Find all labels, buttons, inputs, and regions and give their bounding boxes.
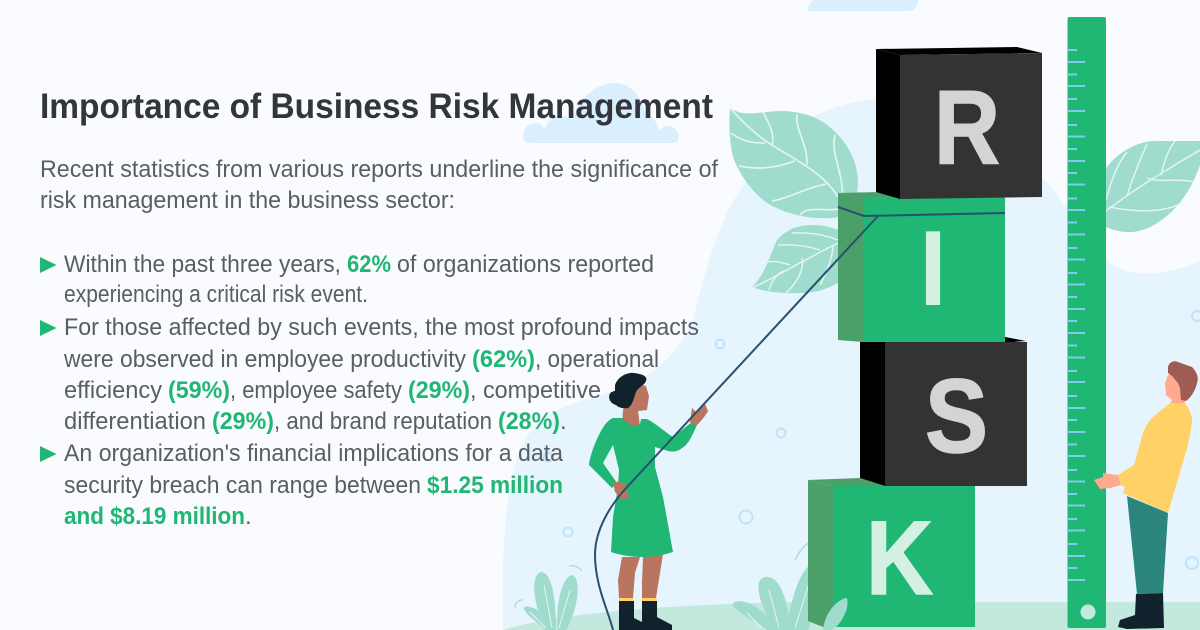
bullet 2 [40, 314, 699, 435]
bullet 2: (28%) [498, 408, 560, 435]
letter R: R [934, 70, 1000, 186]
plant sprigs [515, 540, 823, 608]
foreground plant leaf [823, 598, 848, 630]
plants left [524, 572, 578, 630]
large leaf [729, 108, 858, 218]
hair [609, 373, 646, 408]
block I [838, 192, 1005, 342]
dress [589, 418, 697, 557]
bullet 1: Within the past three years, [64, 251, 341, 278]
plants right [733, 563, 823, 630]
letter K: K [866, 500, 933, 617]
bullet marker 3 [40, 446, 56, 462]
boots [1118, 593, 1164, 629]
neck and face [622, 384, 649, 426]
middle cloud [523, 83, 679, 143]
bullet marker 1 [40, 257, 56, 273]
bullet 2: differentiation [64, 408, 206, 435]
bullet 2: efficiency [64, 377, 162, 404]
bullet 3: $1.25 million [427, 472, 563, 499]
sweater [1118, 403, 1192, 513]
bullet 1: of organizations reported [397, 251, 654, 278]
intro text: risk management in the business sector: [40, 187, 455, 214]
intro text: Recent statistics from various reports underline the significance of [40, 156, 718, 183]
bullet 2: , employee safety [230, 377, 402, 404]
bullet 2: , and brand reputation [274, 408, 492, 435]
legs [618, 554, 663, 598]
top cloud [808, 0, 918, 11]
socks [619, 598, 656, 601]
block R [876, 47, 1042, 199]
bullet 3: and $8.19 million [64, 503, 245, 530]
ground [503, 602, 1200, 630]
bullet 2: (29%) [212, 408, 274, 435]
bubbles [544, 311, 1200, 569]
bullet 2: , competitive [470, 377, 601, 404]
block S [860, 336, 1027, 486]
bullet 2: were observed in employee productivity [63, 346, 466, 373]
bullet 1: 62% [347, 251, 391, 278]
letter S: S [925, 358, 988, 475]
trousers [1127, 496, 1168, 594]
rope [595, 207, 1005, 630]
upper hand [690, 404, 708, 425]
block K [808, 478, 975, 627]
letter I: I [921, 211, 945, 327]
bullet 2: (29%) [408, 377, 470, 404]
bullet 2: For those affected by such events, the most profound impacts [64, 314, 699, 341]
man [1094, 361, 1198, 629]
face and neck [1165, 372, 1185, 404]
ruler ticks [1068, 49, 1085, 581]
woman [589, 373, 708, 630]
bullet 1: experiencing a critical risk event. [64, 281, 368, 308]
bullet 2: (62%) [472, 346, 535, 373]
bullet 1 [40, 251, 654, 308]
right leaf [1106, 141, 1200, 232]
small leaf [752, 225, 838, 293]
hand [1094, 473, 1121, 489]
boots [619, 601, 672, 630]
bullet 2: (59%) [168, 377, 230, 404]
bullet 2: , operational [535, 346, 659, 373]
ruler [1068, 17, 1106, 628]
bullet 3: . [245, 503, 252, 530]
bullet marker 2 [40, 320, 56, 336]
background blob [503, 99, 1200, 630]
title: Importance of Business Risk Management [40, 87, 713, 126]
bullet 3: security breach can range between [64, 472, 421, 499]
bullet 3: An organization's financial implications for a data [64, 440, 564, 467]
intro text [40, 156, 718, 214]
lower hand [613, 482, 629, 500]
bullet 2: . [560, 408, 567, 435]
hair [1168, 361, 1198, 401]
bullet 3 [40, 440, 564, 530]
